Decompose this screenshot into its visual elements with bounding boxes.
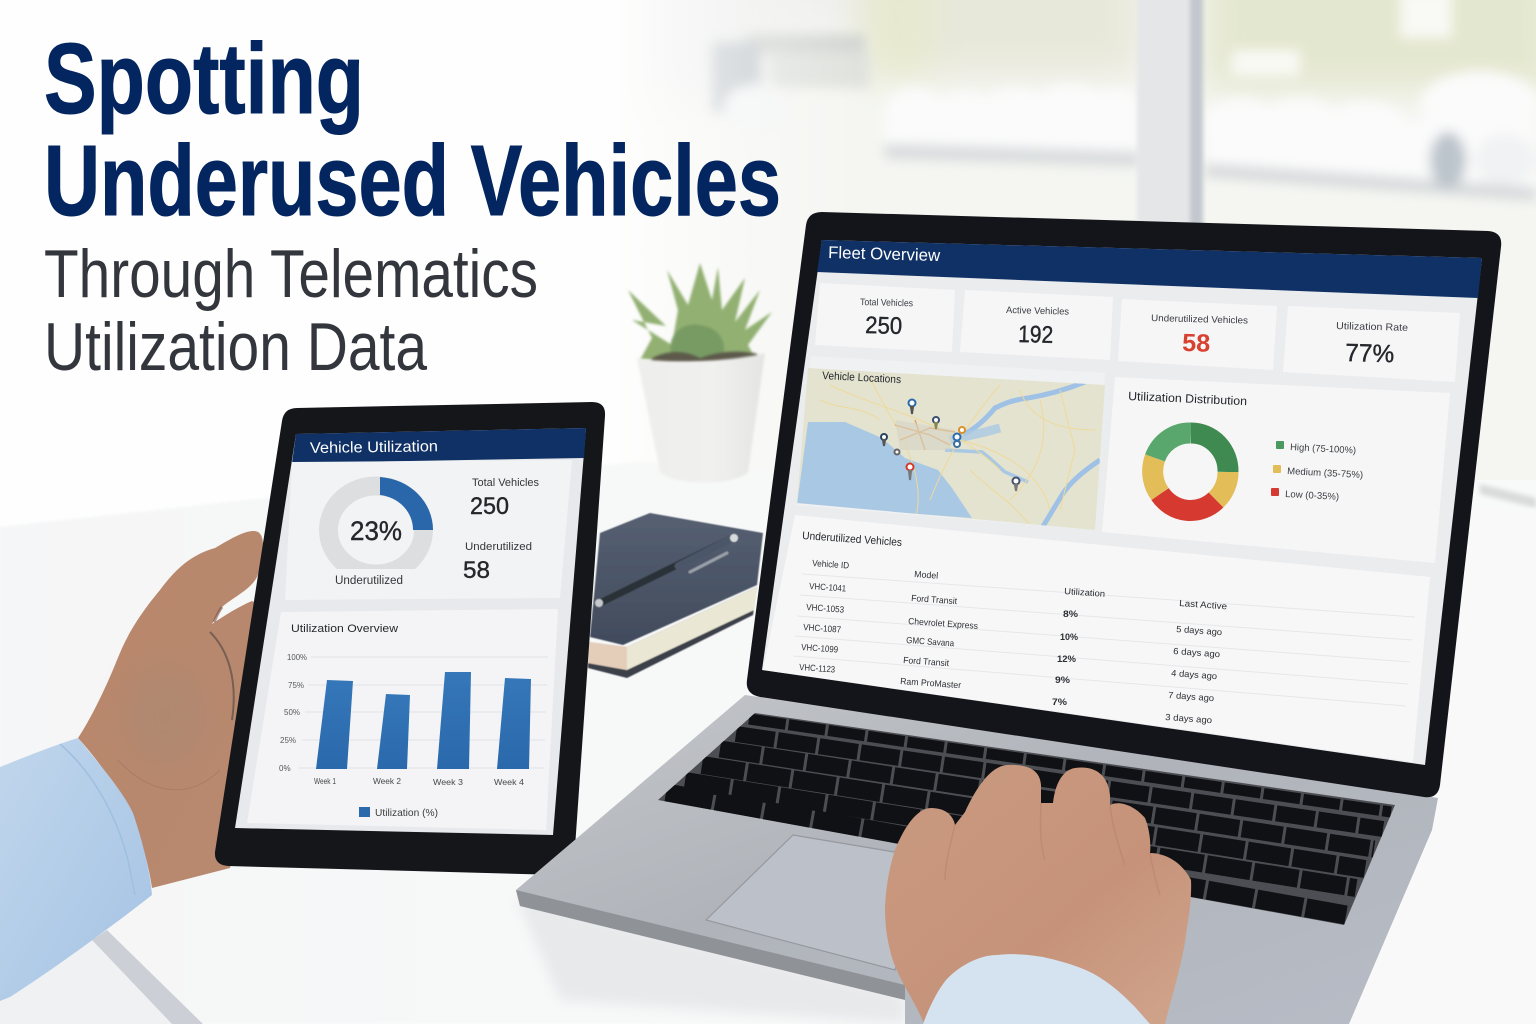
table: underutilized vehicles: 4 days ago [1171, 668, 1217, 681]
donut chart: utilization distribution: Utilization Distribution [1128, 389, 1247, 408]
table: underutilized vehicles: Chevrolet Express [908, 616, 979, 631]
bar chart: utilization overview: 100% [287, 653, 307, 662]
card: active vehicles: 192 [1018, 321, 1054, 349]
tablet screen [235, 428, 586, 835]
title [44, 23, 781, 385]
notebook with pen [588, 513, 763, 678]
title: Underused Vehicles [44, 125, 781, 237]
table: underutilized vehicles [763, 515, 1430, 762]
card: gauge and stats: 58 [463, 557, 490, 584]
screen header [817, 240, 1482, 298]
card: underutilized vehicles: Underutilized Vehicles [1151, 313, 1248, 327]
table: underutilized vehicles: Last Active [1179, 598, 1227, 611]
table: underutilized vehicles: 3 days ago [1165, 712, 1212, 725]
card: underutilized vehicles: 58 [1182, 329, 1211, 358]
card: gauge and stats: 23% [350, 516, 402, 546]
laptop [516, 212, 1501, 1024]
keyboard [658, 713, 1395, 925]
donut chart: utilization distribution: High (75-100%) [1290, 442, 1356, 456]
title: Utilization Data [44, 309, 427, 385]
card: utilization rate: 77% [1345, 339, 1395, 368]
icon: potted plant [628, 263, 772, 482]
tablet header [292, 428, 586, 463]
card: underutilized vehicles [1118, 299, 1277, 370]
trackpad [706, 835, 930, 970]
card: total vehicles: 250 [865, 312, 903, 340]
table: underutilized vehicles: 5 days ago [1176, 624, 1222, 637]
map: vehicle locations: Vehicle Locations [822, 370, 902, 386]
right hand on keyboard [885, 765, 1191, 1024]
bar chart: utilization overview: Week 3 [433, 777, 463, 787]
table: underutilized vehicles: 10% [1060, 632, 1078, 642]
map: vehicle locations [797, 356, 1105, 530]
laptop deck [516, 695, 1438, 1024]
table: underutilized vehicles: VHC-1099 [801, 642, 838, 655]
laptop lid [747, 212, 1501, 797]
left shirt sleeve [0, 738, 152, 1001]
table: underutilized vehicles: Ram ProMaster [900, 676, 961, 690]
bar chart: utilization overview: Week 4 [494, 777, 524, 787]
laptop shadow [516, 897, 905, 1024]
card: utilization rate: Utilization Rate [1336, 321, 1409, 334]
table: underutilized vehicles: 8% [1063, 609, 1078, 619]
card: gauge and stats: Underutilized [465, 541, 532, 553]
tablet header: Vehicle Utilization [310, 438, 438, 457]
table: underutilized vehicles: GMC Savana [906, 635, 954, 648]
title: Through Telematics [44, 236, 538, 312]
donut chart: utilization distribution: Low (0-35%) [1285, 489, 1339, 503]
bar chart: utilization overview: Week 1 [314, 776, 336, 786]
right shirt sleeve [923, 954, 1150, 1024]
table: underutilized vehicles: VHC-1087 [803, 622, 841, 635]
laptop screen [762, 240, 1482, 765]
bar chart: utilization overview [247, 609, 558, 830]
table: underutilized vehicles: VHC-1123 [799, 662, 835, 675]
tablet body [215, 402, 605, 875]
title: Spotting [44, 23, 364, 135]
table: underutilized vehicles: 12% [1057, 654, 1076, 664]
table: underutilized vehicles: 9% [1055, 675, 1070, 685]
table: underutilized vehicles: Underutilized Vehicles [802, 530, 903, 549]
card: gauge and stats [285, 460, 572, 600]
table: underutilized vehicles: VHC-1041 [809, 581, 846, 594]
donut chart: utilization distribution: Medium (35-75%) [1287, 466, 1363, 481]
table: underutilized vehicles: Vehicle ID [812, 558, 850, 571]
card: total vehicles [815, 283, 955, 352]
bar chart: utilization overview: 50% [284, 708, 300, 717]
card: gauge and stats: Underutilized [335, 575, 403, 587]
donut chart: utilization distribution [1102, 377, 1450, 563]
card: utilization rate [1283, 306, 1460, 382]
table: underutilized vehicles: Ford Transit [911, 593, 958, 606]
card: active vehicles [960, 290, 1113, 360]
blurred parked cars [723, 71, 1536, 200]
screen header: Fleet Overview [828, 243, 941, 265]
map pins [881, 400, 1020, 491]
table: underutilized vehicles: VHC-1053 [806, 602, 844, 615]
bar chart: utilization overview: Week 2 [373, 776, 401, 786]
bar chart: utilization overview: 75% [288, 681, 304, 690]
table: underutilized vehicles: Utilization [1064, 586, 1105, 599]
table: underutilized vehicles: 7% [1052, 697, 1067, 707]
table edge [0, 930, 203, 1024]
left hand holding tablet [78, 531, 270, 888]
bar chart: utilization overview: 0% [279, 764, 291, 773]
table: underutilized vehicles: 6 days ago [1173, 646, 1220, 659]
table: underutilized vehicles: Model [914, 569, 938, 581]
bar chart: utilization overview: Utilization (%) [375, 807, 438, 819]
bar chart: utilization overview: Utilization Overview [291, 623, 398, 635]
table: underutilized vehicles: Ford Transit [903, 655, 950, 668]
card: gauge and stats: 250 [470, 493, 509, 520]
card: active vehicles: Active Vehicles [1006, 305, 1069, 318]
card: total vehicles: Total Vehicles [860, 297, 913, 309]
table: underutilized vehicles: 7 days ago [1168, 690, 1214, 703]
bar chart: utilization overview: 25% [280, 736, 296, 745]
tablet [215, 402, 605, 875]
card: gauge and stats: Total Vehicles [472, 477, 539, 489]
